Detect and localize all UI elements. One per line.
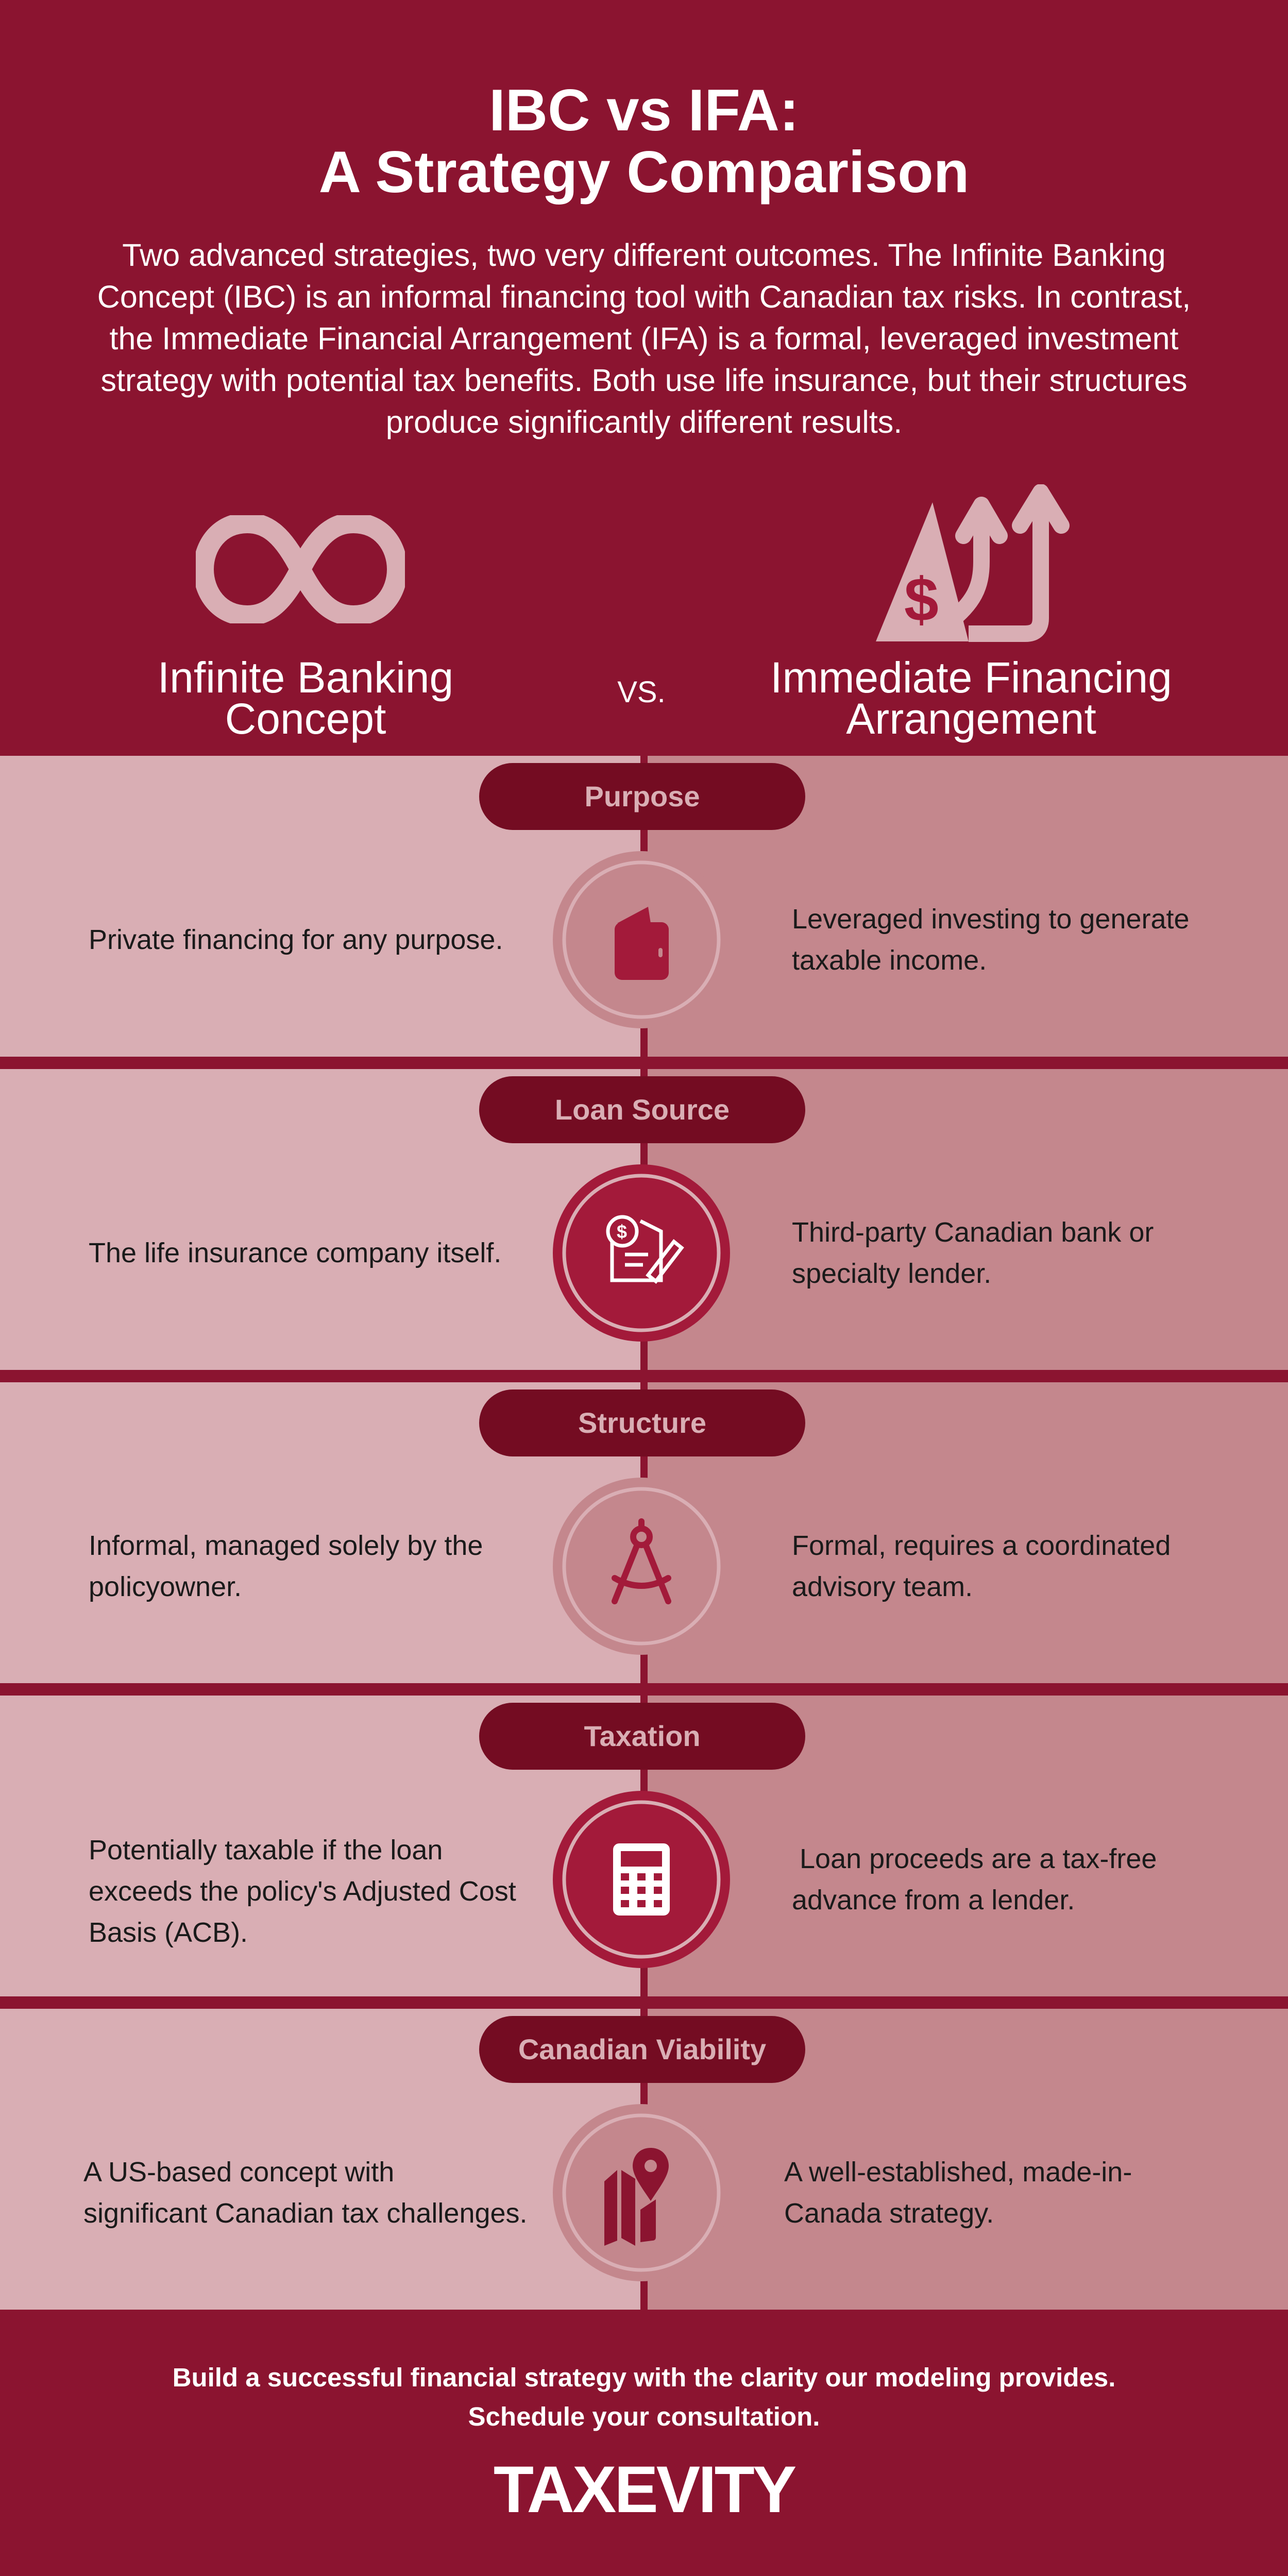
- text: IFA structure: Formal, requires a coordinated: [792, 1530, 1171, 1561]
- intro paragraph: Two advanced strategies, two very different outcomes. The Infinite Banking: [122, 238, 1166, 273]
- icon: infinity: [196, 515, 405, 623]
- row: Purpose: [0, 756, 1288, 1057]
- logo: TAXEVITY: TAXEVITY: [494, 2453, 794, 2527]
- icon: leveraged growth arrows: [876, 484, 1070, 642]
- row: Loan Source: [0, 1069, 1288, 1370]
- text: IBC viability: [83, 2157, 528, 2229]
- icon: leveraged growth arrows: $: [904, 565, 939, 634]
- text: IFA purpose: taxable income.: [792, 945, 987, 976]
- footer call to action: Build a successful financial strategy with the clarity our modeling provides.: [173, 2363, 1115, 2392]
- text: IFA structure: advisory team.: [792, 1571, 973, 1602]
- heading: vs: VS.: [617, 675, 666, 709]
- text: IFA viability: [784, 2157, 1132, 2229]
- text: IBC loan source: The life insurance company itself.: [89, 1238, 501, 1268]
- icon: compass: [553, 1478, 720, 1655]
- text: IFA taxation: Loan proceeds are a tax-free: [800, 1843, 1157, 1874]
- icon: document with dollar: [553, 1164, 730, 1342]
- text: IFA loan source: Third-party Canadian bank or: [792, 1217, 1154, 1248]
- text: IBC taxation: exceeds the policy's Adjusted Cost: [89, 1876, 516, 1907]
- text: IBC purpose: Private financing for any purpose.: [89, 924, 503, 955]
- intro paragraph: Concept (IBC) is an informal financing tool with Canadian tax risks. In contrast,: [97, 279, 1191, 314]
- text: IFA loan source: specialty lender.: [792, 1258, 991, 1289]
- text: IBC taxation: Potentially taxable if the loan: [89, 1835, 443, 1866]
- intro paragraph: produce significantly different results.: [386, 404, 902, 439]
- heading: Immediate Financing Arrangement: Immediate Financing: [770, 653, 1172, 702]
- icon: calculator: [553, 1791, 730, 1968]
- text: IFA taxation: [792, 1843, 1157, 1916]
- text: IFA purpose: Leveraged investing to generate: [792, 904, 1190, 935]
- icon: document with dollar: $: [617, 1221, 627, 1242]
- text: IFA viability: Canada strategy.: [784, 2198, 994, 2229]
- text: IBC taxation: [89, 1835, 516, 1948]
- pill: Structure: [479, 1389, 805, 1456]
- title: A Strategy Comparison: [319, 140, 969, 205]
- text: IFA taxation: advance from a lender.: [792, 1885, 1075, 1916]
- heading: Infinite Banking Concept: Infinite Banking: [158, 653, 453, 702]
- intro paragraph: the Immediate Financial Arrangement (IFA) is a formal, leveraged investment: [110, 321, 1178, 356]
- text: IBC viability: A US-based concept with: [83, 2157, 394, 2188]
- footer call to action: [0, 2358, 1288, 2436]
- icon: wallet: [553, 851, 720, 1028]
- text: IFA viability: A well-established, made-in-: [784, 2157, 1132, 2188]
- pill: Loan Source: [479, 1076, 805, 1143]
- text: IBC taxation: Basis (ACB).: [89, 1917, 248, 1948]
- intro paragraph: strategy with potential tax benefits. Both use life insurance, but their structures: [101, 363, 1187, 398]
- text: IBC structure: Informal, managed solely by the: [89, 1530, 483, 1561]
- pill: Purpose: [479, 763, 805, 830]
- title: [319, 78, 969, 205]
- text: IBC structure: policyowner.: [89, 1571, 242, 1602]
- intro paragraph: [97, 238, 1191, 439]
- text: IFA loan source: [792, 1217, 1154, 1289]
- heading: Immediate Financing Arrangement: [770, 653, 1172, 743]
- row: Structure: [0, 1382, 1288, 1683]
- text: IFA structure: [792, 1530, 1171, 1602]
- icon: map pin: [553, 2104, 720, 2281]
- text: IBC structure: [89, 1530, 483, 1602]
- pill: Taxation: Taxation: [584, 1720, 701, 1752]
- row: Taxation: [0, 1696, 1288, 1996]
- row: Canadian Viability: [0, 2009, 1288, 2310]
- text: IBC viability: significant Canadian tax challenges.: [83, 2198, 528, 2229]
- pill: Loan Source: Loan Source: [555, 1093, 730, 1126]
- pill: Structure: Structure: [578, 1406, 706, 1439]
- pill: Purpose: Purpose: [584, 780, 700, 812]
- pill: Canadian Viability: [479, 2016, 805, 2083]
- heading: Infinite Banking Concept: [158, 653, 453, 743]
- heading: Infinite Banking Concept: Concept: [225, 694, 386, 743]
- heading: Immediate Financing Arrangement: Arrangement: [846, 694, 1096, 743]
- pill: Taxation: [479, 1703, 805, 1770]
- pill: Canadian Viability: Canadian Viability: [518, 2033, 766, 2065]
- title: IBC vs IFA:: [489, 78, 799, 143]
- footer call to action: Schedule your consultation.: [468, 2402, 820, 2431]
- text: IFA purpose: [792, 904, 1190, 976]
